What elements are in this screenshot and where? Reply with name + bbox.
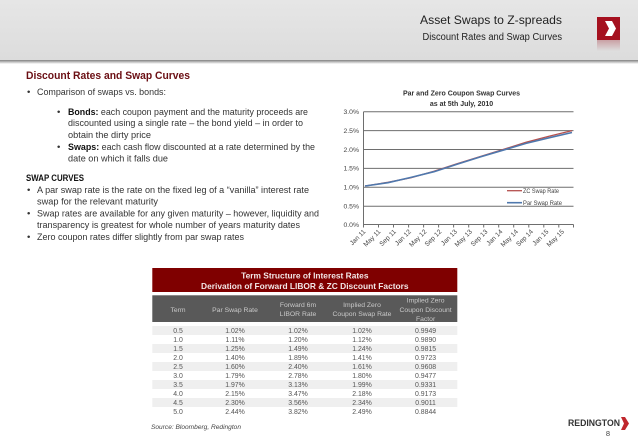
table: term structure of interest rates: [152, 268, 457, 416]
text block: swap curves: A par swap rate is the rate on the fixed leg of a “vanilla” interest rate: [37, 185, 309, 196]
text block: comparison of swaps vs bonds: date on which it falls due: [68, 154, 168, 164]
table data: 2.44%: [225, 409, 245, 416]
chart title: [403, 90, 520, 108]
table data: 2.15%: [225, 391, 245, 398]
text block: swap curves: •: [27, 208, 30, 220]
x axis labels: May 14: [500, 228, 520, 249]
x axis labels: May 13: [454, 228, 474, 249]
chart title: as at 5th July, 2010: [430, 101, 493, 108]
table data: 2.0: [173, 355, 183, 362]
table data: 2.40%: [288, 364, 308, 371]
table data: 0.5: [173, 328, 183, 335]
table data: 0.9011: [415, 400, 436, 407]
table data: 1.89%: [288, 355, 308, 362]
table data: 0.9723: [415, 355, 436, 362]
table data: [173, 328, 436, 416]
icon: red chevron button: [597, 17, 620, 51]
y axis labels: 1.0%: [344, 184, 359, 192]
text block: comparison of swaps vs bonds: •: [57, 107, 60, 118]
table data: 2.30%: [225, 400, 245, 407]
table data: 3.47%: [288, 391, 308, 398]
table column headers: [152, 295, 457, 323]
chart title: Par and Zero Coupon Swap Curves: [403, 90, 520, 98]
y axis labels: 1.5%: [344, 166, 359, 172]
text block: comparison of swaps vs bonds: Bonds: each coupon payment and the maturity proceeds are: [68, 107, 308, 118]
table data: 2.5: [173, 364, 183, 371]
table data: 1.97%: [225, 382, 245, 389]
x axis labels: Jan 12: [394, 228, 413, 247]
table data: 3.0: [173, 373, 183, 380]
table data: 2.78%: [288, 373, 308, 380]
table column headers: LIBOR Rate: [280, 311, 317, 318]
table column headers: Factor: [416, 316, 436, 323]
header band: [0, 0, 638, 64]
table data: 1.11%: [225, 337, 245, 344]
table data: 0.9331: [415, 382, 436, 389]
table data: 1.60%: [225, 364, 245, 371]
text block: swap curves: Zero coupon rates differ slightly from par swap rates: [37, 232, 244, 243]
x axis labels: May 12: [408, 228, 429, 249]
x axis labels: Sep 11: [379, 228, 398, 248]
table column headers: Coupon Swap Rate: [333, 311, 392, 318]
table column headers: Implied Zero: [407, 298, 445, 304]
table data: 0.9890: [415, 337, 436, 344]
table data: 4.0: [173, 391, 183, 398]
x axis labels: [349, 228, 566, 249]
table column headers: Par Swap Rate: [212, 307, 258, 314]
text block: comparison of swaps vs bonds: •: [27, 87, 30, 98]
table data: 0.8844: [415, 409, 436, 416]
x axis labels: Sep 14: [515, 228, 535, 248]
table data: 3.82%: [288, 409, 308, 416]
legend: Par Swap Rate: [523, 200, 562, 207]
table data: 2.49%: [352, 409, 372, 416]
text block: comparison of swaps vs bonds: Swaps: each cash flow discounted at a rate determined by the: [68, 142, 315, 153]
table data: 1.61%: [352, 364, 372, 371]
text block: comparison of swaps vs bonds: obtain the dirty price: [68, 130, 151, 141]
ZC swap rate line: [365, 131, 572, 186]
table data: 3.56%: [288, 400, 308, 407]
table data: 1.40%: [225, 355, 245, 362]
x axis labels: Sep 13: [470, 228, 490, 248]
logo: Redington: REDINGTON: [568, 418, 620, 428]
legend: [507, 188, 562, 207]
table data: 1.5: [173, 346, 183, 353]
text block: swap curves: SWAP CURVES: [26, 173, 84, 184]
table data: 1.0: [173, 337, 183, 344]
x axis labels: Jan 14: [485, 228, 505, 247]
table column headers: Implied Zero: [343, 302, 381, 309]
x axis labels: May 11: [363, 228, 383, 248]
table column headers: Coupon Discount: [400, 307, 452, 314]
legend: ZC Swap Rate: [523, 188, 559, 195]
table data: 0.9815: [415, 346, 436, 353]
table data: 1.80%: [352, 373, 372, 380]
table column headers: Term: [170, 307, 186, 314]
table data: 1.20%: [288, 337, 308, 344]
text block: swap curves: transparency is greatest for whole number of years maturity dates: [37, 220, 300, 231]
table title: [152, 268, 457, 292]
y axis labels: 0.0%: [344, 222, 359, 229]
table data: 1.99%: [352, 382, 372, 389]
header title: Asset Swaps to Z-spreads: [420, 13, 562, 27]
table data: 2.18%: [352, 391, 372, 398]
y axis labels: [344, 109, 359, 229]
text block: swap curves: •: [27, 185, 30, 196]
y axis labels: 3.0%: [344, 109, 359, 116]
table data: 1.02%: [288, 328, 308, 335]
table data: 0.9173: [415, 391, 436, 398]
y axis labels: 0.5%: [344, 204, 359, 210]
header subtitle: Discount Rates and Swap Curves: [422, 32, 562, 43]
table data: 4.5: [173, 400, 183, 407]
y axis labels: 2.5%: [344, 128, 359, 135]
table data: 1.02%: [225, 328, 245, 335]
x axis labels: Jan 13: [440, 228, 459, 247]
table data: 1.41%: [352, 355, 372, 362]
table title: Derivation of Forward LIBOR & ZC Discount Factors: [201, 281, 409, 291]
text block: swap curves: Swap rates are available for any given maturity – however, liquidity and: [37, 208, 319, 220]
text block: comparison of swaps vs bonds: Comparison of swaps vs. bonds:: [37, 87, 166, 98]
table data: 1.02%: [352, 328, 372, 335]
logo: Redington: [568, 417, 629, 430]
text block: comparison of swaps vs bonds: discounted using a single rate – the bond yield – in order to: [68, 118, 303, 129]
table title: Term Structure of Interest Rates: [241, 270, 369, 280]
text block: swap curves: •: [27, 232, 30, 243]
table column headers: Forward 6m: [280, 302, 316, 309]
y axis labels: 2.0%: [344, 147, 359, 154]
table data: 1.24%: [352, 346, 372, 353]
par swap rate line: [365, 132, 572, 186]
text block: comparison of swaps vs bonds: [27, 87, 315, 164]
table data: 0.9949: [415, 328, 436, 335]
table data: 2.34%: [352, 400, 372, 407]
line chart: par and zero coupon swap curves: [344, 90, 574, 249]
text block: comparison of swaps vs bonds: •: [57, 142, 60, 153]
text block: swap curves: swap for the relevant maturity: [37, 196, 158, 208]
x axis labels: Jan 11: [349, 228, 368, 247]
table data: 0.9608: [415, 364, 436, 371]
x axis labels: May 15: [546, 228, 566, 249]
section heading: Discount Rates and Swap Curves: [26, 70, 190, 82]
table data: 3.5: [173, 382, 183, 389]
x axis labels: Sep 12: [424, 228, 444, 248]
table data: 1.79%: [225, 373, 245, 380]
table data: 1.12%: [352, 337, 372, 344]
table data: 5.0: [173, 409, 183, 416]
x axis labels: Jan 15: [531, 228, 551, 247]
table data: 1.49%: [288, 346, 308, 353]
table data: 0.9477: [415, 373, 436, 380]
table data: 1.25%: [225, 346, 245, 353]
text block: swap curves: [26, 173, 319, 243]
table data: 3.13%: [288, 382, 308, 389]
page number: 8: [606, 429, 610, 438]
table row shading: [152, 326, 457, 407]
source note: Source: Bloomberg, Redington: [151, 424, 241, 431]
